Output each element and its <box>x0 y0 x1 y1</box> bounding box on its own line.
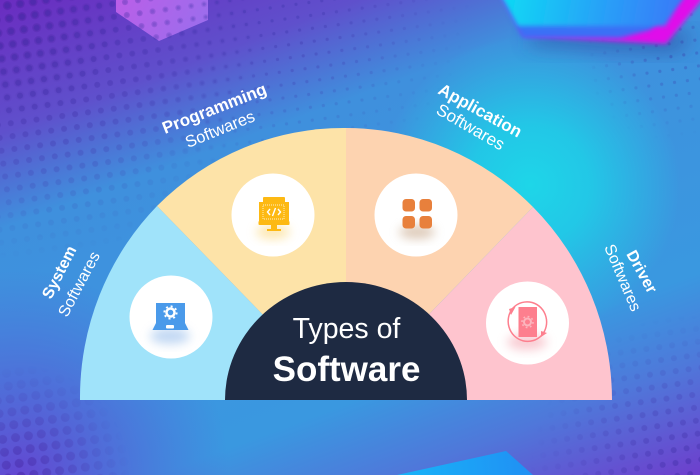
icon badge: phone refresh <box>486 282 569 364</box>
label: programming softwares: Programming <box>160 80 269 138</box>
label: application softwares: Application <box>435 80 525 141</box>
icon badge: laptop <box>130 276 212 358</box>
decorative hexagon: top right <box>498 0 700 50</box>
icon badge: app grid <box>374 174 458 256</box>
semicircle diagram <box>80 128 612 400</box>
segment: programming <box>157 128 346 400</box>
label: driver softwares: Driver <box>623 248 660 296</box>
segment: driver <box>346 207 612 400</box>
decorative hexagon: top left <box>116 0 208 41</box>
label: system softwares <box>39 243 104 320</box>
segment: system <box>80 206 346 400</box>
center semicircle <box>225 282 467 400</box>
center title <box>273 313 420 389</box>
center title: Software <box>273 350 420 389</box>
label: system softwares: System <box>39 243 80 302</box>
segment: application <box>346 128 533 400</box>
label: programming softwares: Softwares <box>183 108 258 152</box>
label: application softwares: Softwares <box>433 100 508 154</box>
center title: Types of <box>293 313 400 345</box>
label: system softwares: Softwares <box>56 249 104 320</box>
decorative shape: bottom <box>397 451 533 475</box>
label: driver softwares: Softwares <box>600 242 644 314</box>
icon badge: code monitor <box>232 174 314 256</box>
